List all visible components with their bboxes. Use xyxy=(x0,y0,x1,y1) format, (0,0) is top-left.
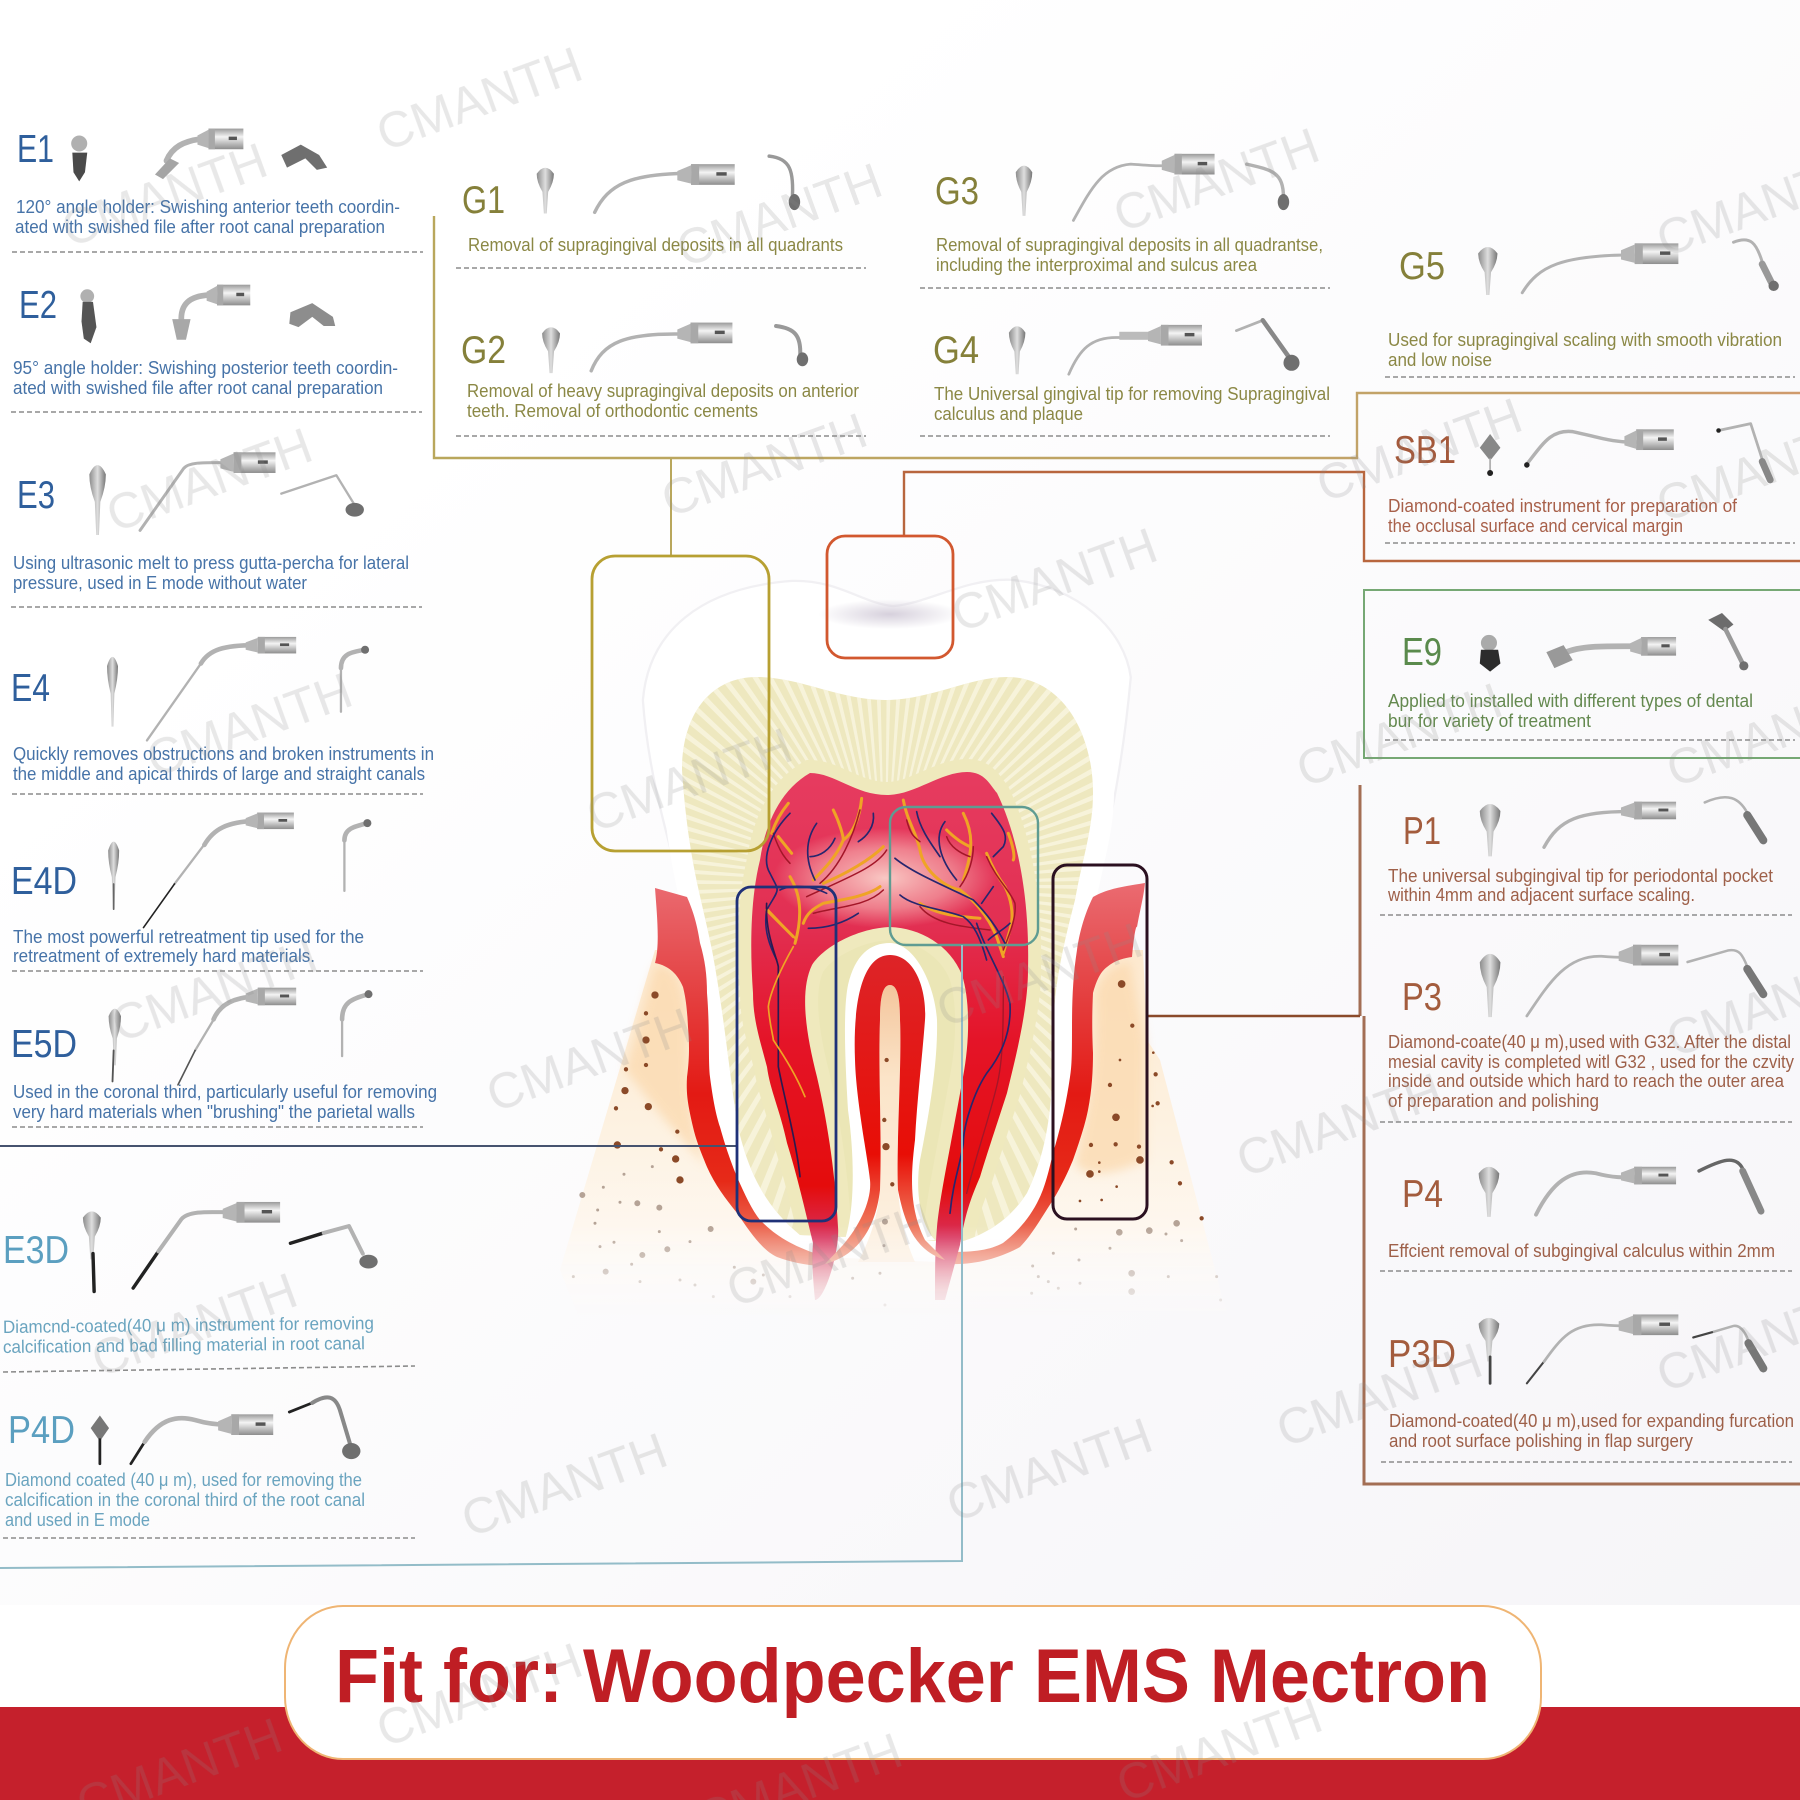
watermarks: CMANTH xyxy=(1229,1062,1449,1188)
gold tooth box xyxy=(592,556,769,851)
watermarks: CMANTH xyxy=(719,1192,939,1318)
tip P1: The universal subgingival tip for periodontal pocket xyxy=(1388,866,1773,886)
tip E9: E9 xyxy=(1402,631,1442,674)
left bone pores xyxy=(573,995,892,1305)
tip E1: E1 xyxy=(17,128,54,171)
watermarks: CMANTH xyxy=(99,417,319,543)
tip G4: calculus and plaque xyxy=(934,404,1083,424)
watermarks: CMANTH xyxy=(939,1407,1159,1533)
tip G5: Used for supragingival scaling with smooth vibration xyxy=(1388,330,1782,350)
tip E2: ated with swished file after root canal preparation xyxy=(13,378,383,398)
navy tooth box xyxy=(737,887,836,1221)
tip P3: inside and outside which hard to reach the outer area xyxy=(1388,1071,1785,1091)
watermarks: CMANTH xyxy=(139,662,359,788)
tip E3D: E3D xyxy=(3,1229,69,1272)
tip P1 xyxy=(1380,797,1792,915)
G4 instruments xyxy=(1009,320,1300,374)
P1 instruments xyxy=(1480,797,1763,856)
G5 instruments xyxy=(1478,240,1779,295)
crown nerves xyxy=(766,798,1015,960)
G3 instruments xyxy=(1016,154,1289,220)
SB1 instruments xyxy=(1480,424,1770,480)
tip G2 xyxy=(456,323,866,436)
red footer band xyxy=(0,1707,1800,1800)
callout frames and connectors xyxy=(0,216,1800,1568)
tip P3 xyxy=(1380,945,1794,1122)
right root nerves xyxy=(950,923,1010,1213)
tip G2: Removal of heavy supragingival deposits on anterior xyxy=(467,381,859,401)
E5D instruments xyxy=(109,988,373,1085)
tip G3: Removal of supragingival deposits in all quadrantse, xyxy=(936,235,1323,255)
tip P3D: and root surface polishing in flap surgery xyxy=(1389,1431,1693,1451)
P3 instruments xyxy=(1480,945,1763,1017)
tip E9: bur for variety of treatment xyxy=(1388,711,1591,731)
tip P3: P3 xyxy=(1402,976,1442,1019)
watermarks: CMANTH xyxy=(1289,672,1509,798)
tip E4D xyxy=(11,813,423,971)
tip P3: of preparation and polishing xyxy=(1388,1091,1599,1111)
tip SB1: the occlusal surface and cervical margin xyxy=(1388,516,1683,536)
E3D instruments xyxy=(83,1202,378,1292)
watermarks: CMANTH xyxy=(369,1632,589,1758)
brown frame around P tips xyxy=(1360,785,1800,1484)
E2 instruments xyxy=(80,285,335,343)
P3D instruments xyxy=(1479,1314,1763,1383)
tip E5D: E5D xyxy=(11,1023,77,1066)
tip E4D: retreatment of extremely hard materials. xyxy=(13,946,315,966)
tooth illustration xyxy=(560,580,1230,1320)
tip E2: E2 xyxy=(19,284,57,327)
P4 instruments xyxy=(1479,1160,1761,1217)
tip E1: 120° angle holder: Swishing anterior teeth coordin- xyxy=(16,197,400,217)
G2 instruments xyxy=(542,323,808,373)
teal frame around E3D and P4D xyxy=(0,945,962,1568)
watermarks: CMANTH xyxy=(579,717,799,843)
central gum arch xyxy=(825,955,945,1264)
tip E1 xyxy=(12,128,423,252)
tip E9 xyxy=(1385,613,1795,740)
tip G1: G1 xyxy=(462,179,505,222)
gold frame around G tips xyxy=(434,216,1800,458)
watermarks: CMANTH xyxy=(479,997,699,1123)
tip G4 xyxy=(920,320,1330,436)
enamel crown xyxy=(643,580,1131,918)
tip E2: 95° angle holder: Swishing posterior teeth coordin- xyxy=(13,358,398,378)
right bone pores xyxy=(1032,984,1221,1300)
watermarks: CMANTH xyxy=(1106,117,1326,243)
white furcation band xyxy=(843,943,937,1245)
black tooth box xyxy=(1053,865,1147,1219)
tip SB1 xyxy=(1385,424,1795,543)
watermarks: CMANTH xyxy=(929,912,1149,1038)
P4D instruments xyxy=(91,1397,360,1464)
tip P4: P4 xyxy=(1402,1173,1443,1216)
tip G4: G4 xyxy=(933,329,979,372)
left root nerves xyxy=(766,903,805,1177)
tip P3D: P3D xyxy=(1388,1333,1456,1376)
tip G1 xyxy=(456,156,866,268)
watermarks: CMANTH xyxy=(1309,387,1529,513)
tip P4D: calcification in the coronal third of the root canal xyxy=(5,1490,365,1510)
tip E4: E4 xyxy=(11,667,50,710)
green frame around E9 xyxy=(1364,590,1800,758)
orange frame around SB1 xyxy=(904,472,1800,561)
tip G2: teeth. Removal of orthodontic cements xyxy=(467,401,758,421)
tip G2: G2 xyxy=(461,329,506,372)
watermarks: CMANTH xyxy=(454,1422,674,1548)
tip E2 xyxy=(11,284,422,412)
tip E4: the middle and apical thirds of large and straight canals xyxy=(13,764,425,784)
G1 instruments xyxy=(537,156,800,214)
watermarks: CMANTH xyxy=(104,927,324,1053)
tip P4D: Diamond coated (40 μ m), used for removing the xyxy=(5,1470,362,1490)
jaw bone xyxy=(568,950,1207,1250)
tip SB1: Diamond-coated instrument for preparation of xyxy=(1388,496,1738,516)
pulp chamber and canals xyxy=(751,772,1028,1300)
gum tissue left xyxy=(655,888,820,1266)
tip G5: and low noise xyxy=(1388,350,1492,370)
E9 instruments xyxy=(1480,613,1748,672)
tip E4 xyxy=(11,637,434,794)
tip E1: ated with swished file after root canal preparation xyxy=(15,217,385,237)
tip P4 xyxy=(1380,1160,1792,1271)
gold connector xyxy=(670,458,672,556)
tip P4: Effcient removal of subgingival calculus within 2mm xyxy=(1388,1241,1775,1261)
E1 instruments xyxy=(71,129,327,181)
tip E3: E3 xyxy=(17,474,55,517)
tip E9: Applied to installed with different types of dental xyxy=(1388,691,1753,711)
tip E3D xyxy=(3,1202,415,1372)
tip P4D: and used in E mode xyxy=(5,1510,150,1530)
tip P4D: P4D xyxy=(8,1409,75,1452)
teal tooth box xyxy=(890,807,1038,945)
brown connector xyxy=(1147,1015,1360,1017)
tip P1: within 4mm and adjacent surface scaling. xyxy=(1387,885,1695,905)
watermarks: CMANTH xyxy=(654,402,874,528)
tip P4D xyxy=(3,1397,415,1538)
tip E4: Quickly removes obstructions and broken instruments in xyxy=(13,744,434,764)
watermarks: CMANTH xyxy=(944,517,1164,643)
tip G3: G3 xyxy=(935,170,979,213)
tip G1: Removal of supragingival deposits in all quadrants xyxy=(468,235,843,255)
tip E5D: Used in the coronal third, particularly useful for removing xyxy=(13,1082,437,1102)
tip E4D: E4D xyxy=(11,860,77,903)
tip P3D xyxy=(1381,1314,1794,1462)
tip E3D: Diamcnd-coated(40 μ m) instrument for removing xyxy=(3,1313,374,1337)
gum tissue right xyxy=(950,883,1145,1264)
E4D instruments xyxy=(108,813,371,928)
navy connector xyxy=(0,1145,737,1147)
watermarks: CMANTH xyxy=(1269,1332,1489,1458)
compatibility banner: Fit for: Woodpecker EMS Mectron xyxy=(335,1634,1490,1719)
watermarks: CMANTH xyxy=(54,132,274,258)
tip E3: pressure, used in E mode without water xyxy=(13,573,307,593)
watermarks: CMANTH xyxy=(669,152,889,278)
tooth root, gum and bone cross-section xyxy=(560,660,1230,1320)
tip E5D: very hard materials when "brushing" the parietal walls xyxy=(13,1102,415,1122)
E4 instruments xyxy=(107,637,369,740)
tip E4D: The most powerful retreatment tip used for the xyxy=(13,927,364,947)
compatibility banner xyxy=(285,1606,1541,1759)
tip G5 xyxy=(1385,240,1795,377)
dentin xyxy=(682,677,1093,1242)
central bone xyxy=(858,985,915,1262)
tip G4: The Universal gingival tip for removing Supragingival xyxy=(934,384,1330,404)
tip E5D xyxy=(11,988,437,1127)
tip G5: G5 xyxy=(1399,245,1445,288)
tip SB1: SB1 xyxy=(1394,429,1456,472)
peach bone shading xyxy=(625,962,1145,1173)
watermarks: CMANTH xyxy=(369,36,589,162)
tip P1: P1 xyxy=(1403,810,1441,853)
cementum halo xyxy=(667,795,1114,1258)
tip E3D: calcification and bad filling material in root canal xyxy=(3,1333,365,1357)
watermarks: CMANTH xyxy=(84,1262,304,1388)
tip G3: including the interproximal and sulcus area xyxy=(936,255,1258,275)
E3 instruments xyxy=(89,452,364,535)
tip E3 xyxy=(11,452,422,607)
orange tooth box xyxy=(827,536,953,658)
tip G3 xyxy=(920,154,1330,288)
tip E3: Using ultrasonic melt to press gutta-percha for lateral xyxy=(13,553,409,573)
